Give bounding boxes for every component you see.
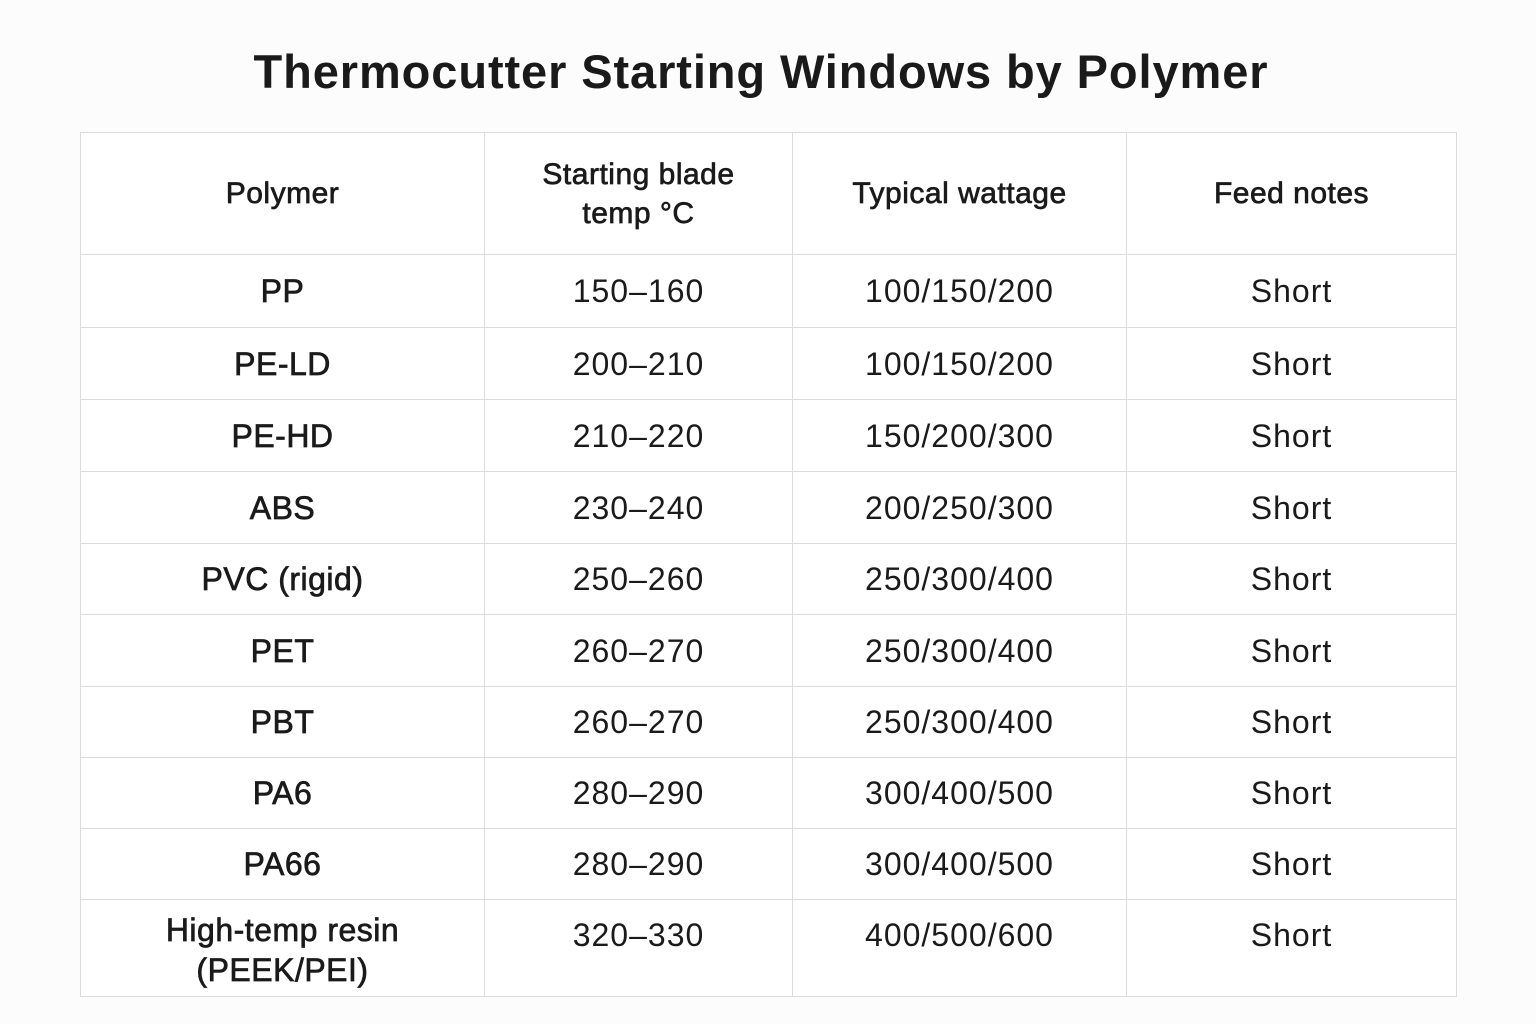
row: PBT: 260–270 [573,704,704,740]
row: high-temp resin: (PEEK/PEI) [196,952,369,988]
header row: Starting blade [542,158,735,190]
row: ABS: ABS [250,490,315,526]
row: PE-LD: 100/150/200 [865,346,1054,382]
row: PA66: PA66 [244,846,321,882]
row: PE-HD: 150/200/300 [865,418,1054,454]
row: PA66: 300/400/500 [865,846,1054,882]
row: PE-LD: PE-LD [234,346,331,382]
row: PP: 100/150/200 [865,273,1054,309]
row: PE-LD: 200–210 [573,346,704,382]
row: PE-LD [81,328,1456,400]
row: high-temp resin [166,900,1332,996]
row: PA6: 300/400/500 [865,775,1054,811]
row: PET: 250/300/400 [865,632,1054,668]
header row [81,133,1456,255]
row: ABS: 200/250/300 [865,490,1054,526]
row: ABS: Short [1251,490,1332,526]
title: Thermocutter Starting Windows by Polymer [254,45,1268,98]
row: PA6 [81,758,1456,829]
header row: Feed notes [1214,177,1369,210]
row: PA66: 280–290 [573,846,704,882]
row: PET [81,615,1456,687]
row: PA66: Short [1251,846,1332,882]
row: PP: Short [1251,273,1332,309]
row: PET: PET [251,632,314,668]
header row: temp °C [582,196,695,230]
row: PE-HD: PE-HD [231,418,334,454]
row: PE-HD [81,400,1456,472]
row: PVC: 250/300/400 [865,561,1054,597]
row: PP: 150–160 [573,273,704,309]
row: PA66 [81,829,1456,900]
row: PA6: PA6 [253,775,312,811]
row: PVC: Short [1251,561,1332,597]
row: PA6: Short [1251,775,1332,811]
row: PET: 260–270 [573,632,704,668]
row: PE-LD: Short [1251,346,1332,382]
row: PET: Short [1251,632,1332,668]
row: PA6: 280–290 [573,775,704,811]
header row: Polymer [226,177,339,210]
row: PP [81,255,1456,328]
row: high-temp resin: 320–330 [573,917,704,953]
row: PVC: 250–260 [573,561,704,597]
row: high-temp resin: Short [1251,917,1332,953]
row: PBT: 250/300/400 [865,704,1054,740]
row: PBT: PBT [251,704,314,740]
header row: Typical wattage [852,177,1067,210]
row: PBT [81,687,1456,758]
row: ABS [81,472,1456,544]
row: PP: PP [261,273,304,309]
table: polymer starting windows [80,132,1457,997]
row: PVC: PVC (rigid) [202,561,363,597]
row: high-temp resin: High-temp resin [166,912,399,948]
row: PE-HD: 210–220 [573,418,704,454]
row: ABS: 230–240 [573,490,704,526]
row: PVC [81,544,1456,615]
row: PE-HD: Short [1251,418,1332,454]
row: high-temp resin: 400/500/600 [865,917,1054,953]
row: PBT: Short [1251,704,1332,740]
